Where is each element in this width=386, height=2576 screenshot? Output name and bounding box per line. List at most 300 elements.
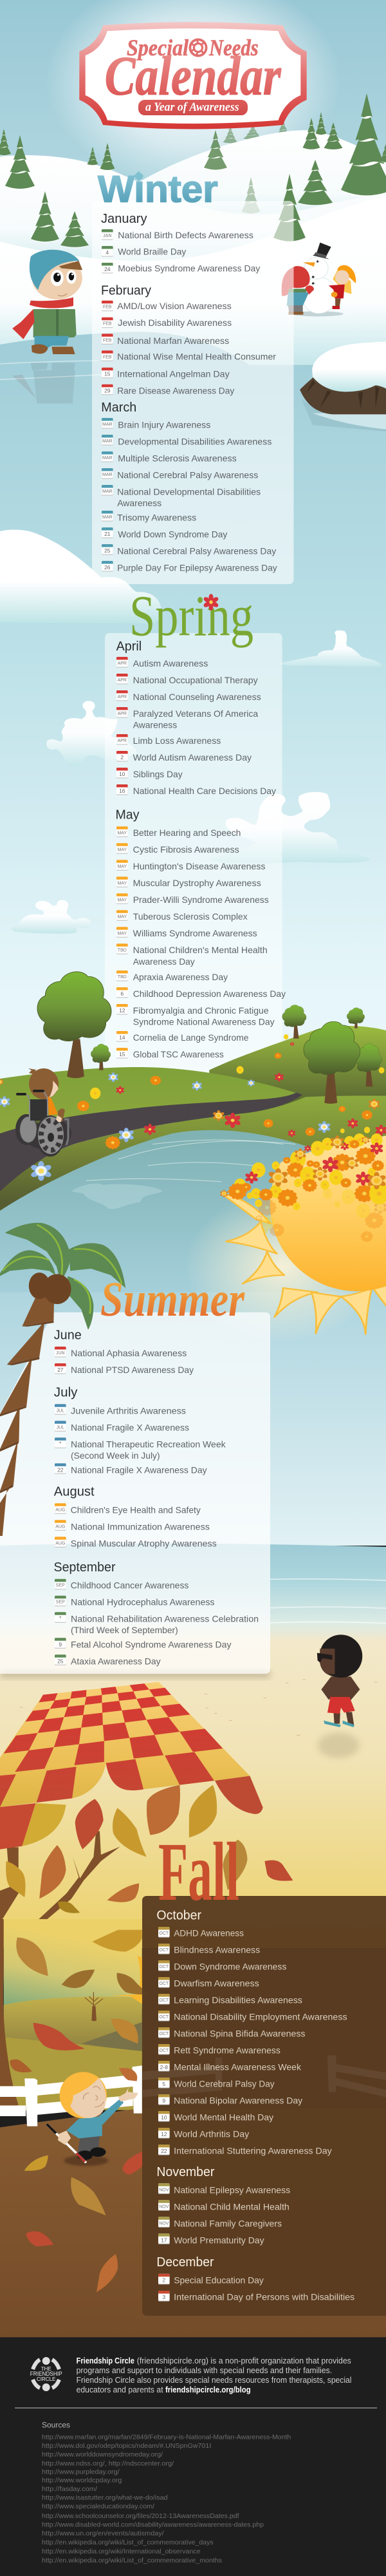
item: prematurity: World Prematurity Day bbox=[174, 2235, 264, 2246]
cloud reflection in lake bbox=[71, 1184, 163, 1209]
item: occupational therapy: National Occupational Therapy bbox=[133, 675, 258, 685]
item: tuberous sclerosis: Tuberous Sclerosis Complex bbox=[133, 911, 248, 922]
sun glimpse bbox=[109, 1956, 142, 2004]
checkered autumn tree canopy bbox=[0, 1682, 293, 1975]
item: eye health: Children's Eye Health and Safety bbox=[71, 1504, 201, 1515]
item: cerebral palsy day: National Cerebral Palsy Awareness Day bbox=[117, 545, 276, 556]
item: children's mental health bbox=[116, 943, 268, 967]
red squares bbox=[0, 1683, 223, 1807]
distant hill bbox=[4, 1996, 142, 2061]
ghost fence and trees inside panel bbox=[143, 2056, 386, 2098]
palm fronds bbox=[0, 1223, 125, 1330]
item: bipolar: National Bipolar Awareness Day bbox=[174, 2096, 302, 2106]
item: jewish disability: FEB bbox=[103, 322, 112, 327]
plaque frame bbox=[79, 22, 307, 129]
body bbox=[321, 1676, 360, 1700]
item: fibromyalgia: Fibromyalgia and Chronic Fatigue bbox=[133, 1005, 269, 1016]
item: blindness: OCT bbox=[159, 1948, 169, 1953]
sea bbox=[0, 1543, 386, 1642]
item: developmental: MAR bbox=[102, 439, 113, 444]
item: paralyzed veterans: Paralyzed Veterans Of America bbox=[133, 708, 258, 719]
title line: Needs: Needs bbox=[208, 35, 259, 61]
heading: Spring: Spring bbox=[129, 585, 253, 649]
item: rehabilitation: * bbox=[59, 1615, 62, 1621]
item: hydrocephalus: SEP bbox=[56, 1600, 65, 1605]
leaves over scene bbox=[10, 1930, 150, 2246]
item: children's mental health: National Children's Mental Health bbox=[133, 945, 268, 955]
sun flower crown bbox=[220, 1131, 386, 1244]
shirt bbox=[66, 2098, 124, 2139]
item: hearing and speech: MAY bbox=[117, 831, 127, 835]
item: MS: Multiple Sclerosis Awareness bbox=[118, 453, 237, 463]
lake ripples bbox=[86, 1140, 295, 1182]
item: muscular dystrophy: MAY bbox=[117, 881, 127, 886]
item: cerebral palsy: MAR bbox=[102, 473, 113, 477]
item: siblings bbox=[116, 768, 183, 779]
person on beach bbox=[317, 1634, 362, 1758]
item: rehabilitation: National Rehabilitation Awareness Celebration bbox=[71, 1613, 259, 1624]
snowman with two kids bbox=[282, 243, 356, 316]
item: dwarfism: OCT bbox=[159, 1982, 169, 1986]
item: birth defects: JAN bbox=[103, 234, 111, 238]
title line: Calendar: Calendar bbox=[105, 45, 282, 107]
yellow squares bbox=[0, 1682, 250, 1807]
sand speckles bbox=[20, 1680, 377, 1736]
item: braille: 4 bbox=[106, 249, 109, 256]
item: tuberous sclerosis: MAY bbox=[117, 914, 127, 919]
item: MS: MAR bbox=[102, 456, 113, 460]
item: ADHD: ADHD Awareness bbox=[174, 1928, 244, 1938]
sources list: http://www.un.org/en/events/autismday/ bbox=[42, 2530, 164, 2537]
item: aphasia: JUN bbox=[56, 1351, 65, 1356]
item: special education: Special Education Day bbox=[174, 2275, 264, 2286]
item: childhood cancer: SEP bbox=[56, 1584, 65, 1588]
right hill bbox=[209, 1026, 386, 1116]
item: apraxia: TBD bbox=[118, 975, 127, 980]
item: down syndrome: 21 bbox=[104, 531, 111, 537]
sources list: http://www.purpleday.org/ bbox=[42, 2468, 120, 2476]
heading: July: July bbox=[54, 1385, 77, 1399]
flip-flops bbox=[324, 1721, 354, 1727]
item: paralyzed veterans bbox=[116, 707, 258, 730]
item: stuttering: 22 bbox=[161, 2148, 167, 2154]
hands bbox=[58, 2088, 138, 2145]
item: down syndrome: OCT bbox=[159, 1965, 169, 1969]
seat back bbox=[30, 1099, 48, 1121]
item: cerebral palsy: National Cerebral Palsy Awareness bbox=[117, 469, 258, 480]
item: therapeutic recreation: * bbox=[59, 1440, 62, 1446]
child in wheelchair bbox=[15, 1068, 71, 1157]
heading: April: April bbox=[116, 639, 142, 654]
item: wise mental health: National Wise Mental Health Consumer bbox=[117, 351, 276, 361]
boy in teal hat bbox=[12, 250, 82, 404]
shadow bbox=[318, 1732, 360, 1758]
item: limb loss: Limb Loss Awareness bbox=[133, 735, 221, 746]
item: siblings: 10 bbox=[119, 771, 125, 777]
background: frozen water and spring sky bbox=[0, 322, 386, 1159]
item: brain injury: MAR bbox=[102, 422, 113, 427]
spring landscape and lake bbox=[0, 1026, 386, 1341]
item: stuttering: International Stuttering Awareness Day bbox=[174, 2146, 332, 2156]
item: fetal alcohol: 9 bbox=[59, 1641, 62, 1647]
logo: The Friendship Circle bbox=[30, 2357, 62, 2391]
item: fibromyalgia: Syndrome National Awareness Day bbox=[133, 1017, 275, 1027]
item: national developmental: MAR bbox=[102, 489, 113, 494]
road bbox=[0, 1093, 302, 1191]
item: aphasia: National Aphasia Awareness bbox=[71, 1348, 187, 1358]
item: hearing and speech: Better Hearing and Speech bbox=[133, 828, 241, 838]
item: siblings: Siblings Day bbox=[133, 769, 183, 779]
head bbox=[320, 1649, 340, 1678]
item: apraxia: Apraxia Awareness Day bbox=[133, 972, 228, 982]
sources heading: Sources bbox=[42, 2420, 70, 2429]
sources list: http://www.disabled-world.com/disability/awareness/awareness-dates.php bbox=[42, 2521, 264, 2529]
item: learning disabilities: OCT bbox=[159, 1998, 169, 2003]
item: fragile X day: 22 bbox=[57, 1466, 64, 1473]
frozen pond surface with streaks bbox=[0, 332, 386, 644]
item: global TSC: 15 bbox=[119, 1051, 125, 1057]
sources list: http://www.schoolcounselor.org/files/2012-13AwarenessDates.pdf bbox=[42, 2512, 239, 2520]
item: moebius: Moebius Syndrome Awareness Day bbox=[118, 263, 260, 274]
sources list: http://www.isastutter.org/what-we-do/isad bbox=[42, 2494, 168, 2502]
winter fir trees bbox=[0, 93, 386, 248]
logo: The Friendship Circle: FRIENDSHIP bbox=[30, 2371, 62, 2377]
item: huntington's: Huntington's Disease Awareness bbox=[133, 861, 265, 871]
item: mental illness: Mental Illness Awareness Week bbox=[174, 2062, 302, 2072]
item: global TSC: Global TSC Awareness bbox=[133, 1049, 224, 1059]
sand bbox=[0, 1639, 386, 1948]
item: children's mental health: Awareness Day bbox=[133, 956, 195, 967]
heading: Fall: Fall bbox=[158, 1826, 239, 1918]
item: wise mental health: FEB bbox=[103, 355, 112, 359]
meadow and bank bbox=[0, 1095, 386, 1213]
white fence bbox=[0, 2065, 142, 2126]
sources list: http://www.ndss.org/, http://ndsccenter.org/ bbox=[42, 2459, 174, 2467]
item: world CP day: 5 bbox=[162, 2081, 165, 2087]
title glow bbox=[45, 0, 341, 187]
sources list: http://www.dol.gov/odep/topics/ndeam/#.UNSpnGw701I bbox=[42, 2442, 211, 2450]
logo: The Friendship Circle: CIRCLE bbox=[37, 2376, 55, 2382]
item: AMD: FEB bbox=[103, 305, 112, 310]
item: rett: OCT bbox=[159, 2049, 169, 2053]
item: counseling: APR bbox=[118, 695, 127, 699]
item: down syndrome: Down Syndrome Awareness bbox=[174, 1962, 286, 1972]
front wheel bbox=[36, 1115, 64, 1157]
snow-capped stump bbox=[300, 342, 386, 431]
item: learning disabilities: Learning Disabilities Awareness bbox=[174, 1995, 302, 2005]
about text: programs and support to individuals with special needs and their families. bbox=[77, 2366, 332, 2375]
summer sky bbox=[0, 1256, 386, 1546]
footer bbox=[0, 2337, 386, 2576]
item: hydrocephalus: National Hydrocephalus Awareness bbox=[71, 1597, 215, 1607]
big trunk bbox=[0, 1919, 19, 2114]
item: brain injury: Brain Injury Awareness bbox=[118, 419, 210, 430]
item: mental health day: 10 bbox=[161, 2114, 167, 2121]
sources list: http://www.worldcpday.org bbox=[42, 2476, 122, 2484]
sources list: http://en.wikipedia.org/wiki/List_of_commemorative_months bbox=[42, 2557, 222, 2564]
item: PTSD: 27 bbox=[57, 1367, 64, 1373]
item: dwarfism: Dwarfism Awareness bbox=[174, 1978, 259, 1989]
heading: March: March bbox=[101, 401, 136, 415]
logo: The Friendship Circle: THE bbox=[41, 2366, 51, 2372]
item: spinal muscular atrophy: AUG bbox=[55, 1541, 65, 1546]
boy with white cane bbox=[47, 2072, 138, 2166]
trunk notch shadows bbox=[0, 1321, 53, 1493]
about text bbox=[77, 2356, 351, 2394]
palm trunk bbox=[0, 1294, 54, 1536]
heading: June: June bbox=[54, 1328, 82, 1342]
item: juvenile arthritis: Juvenile Arthritis Awareness bbox=[71, 1405, 186, 1416]
item: muscular dystrophy: Muscular Dystrophy Awareness bbox=[133, 878, 261, 888]
brown ground bbox=[0, 2108, 386, 2338]
item: childhood cancer: Childhood Cancer Awareness bbox=[71, 1580, 188, 1591]
item: immunization: AUG bbox=[55, 1524, 65, 1529]
item: cystic fibrosis: MAY bbox=[117, 848, 127, 852]
item: spina bifida: National Spina Bifida Awareness bbox=[174, 2029, 306, 2039]
tree trunk and branches bbox=[0, 1831, 120, 1975]
sun glow bbox=[185, 1191, 381, 1341]
item: prader-willi: Prader-Willi Syndrome Awareness bbox=[133, 895, 269, 905]
back fir trees bbox=[223, 120, 292, 144]
item: developmental: Developmental Disabilities Awareness bbox=[118, 436, 271, 446]
back wheel bbox=[15, 1114, 37, 1145]
item: arthritis day: World Arthritis Day bbox=[174, 2129, 249, 2139]
item: childhood depression: Childhood Depression Awareness Day bbox=[133, 989, 286, 999]
about text: friendshipcircle.org/blog bbox=[165, 2385, 251, 2394]
item: fetal alcohol: Fetal Alcohol Syndrome Awareness Day bbox=[71, 1639, 232, 1649]
item: paralyzed veterans: Awareness bbox=[133, 720, 177, 730]
meadow flowers bbox=[0, 1033, 386, 1181]
item: immunization: National Immunization Awareness bbox=[71, 1521, 210, 1531]
item: children's mental health: TBD bbox=[118, 948, 127, 952]
footrest bbox=[64, 1119, 68, 1145]
item: cerebral palsy day: 25 bbox=[104, 547, 111, 554]
item: cystic fibrosis: Cystic Fibrosis Awareness bbox=[133, 844, 239, 855]
heading: Winter: Winter bbox=[98, 168, 218, 210]
item: fibromyalgia: 12 bbox=[119, 1007, 125, 1014]
clouds bbox=[11, 630, 381, 934]
palm tree bbox=[0, 1223, 125, 1536]
sources list: http://fasday.com/ bbox=[42, 2485, 97, 2493]
item: rett: Rett Syndrome Awareness bbox=[174, 2045, 280, 2056]
item: williams syndrome: Williams Syndrome Awareness bbox=[133, 928, 257, 938]
item: prematurity: 17 bbox=[161, 2237, 167, 2243]
item: counseling: National Counseling Awareness bbox=[133, 692, 261, 702]
item: ataxia: Ataxia Awareness Day bbox=[71, 1656, 161, 1666]
item: therapeutic recreation bbox=[55, 1437, 226, 1461]
panel: summer list bbox=[0, 1312, 270, 1678]
item: health care decisions: 16 bbox=[119, 788, 125, 794]
item: huntington's: MAY bbox=[117, 864, 127, 869]
item: mental illness: 2-8 bbox=[160, 2064, 168, 2070]
item: rare disease: 29 bbox=[104, 388, 111, 394]
item: autism: Autism Awareness bbox=[133, 658, 208, 668]
heading: January: January bbox=[101, 212, 147, 226]
icon: friendship circle logo bbox=[189, 39, 207, 57]
item: rehabilitation: (Third Week of September) bbox=[71, 1625, 178, 1635]
hanging scallop bbox=[215, 1776, 263, 1814]
panel: spring list bbox=[105, 633, 286, 1084]
item: williams syndrome: MAY bbox=[117, 931, 127, 936]
legs bbox=[333, 1712, 354, 1725]
orange shirt bbox=[48, 1096, 58, 1115]
item: rehabilitation bbox=[55, 1612, 259, 1635]
palm midribs bbox=[3, 1225, 122, 1314]
pants bbox=[78, 2136, 100, 2153]
spring trees bbox=[37, 972, 381, 1104]
item: fragile X: JUL bbox=[57, 1425, 64, 1430]
panel: fall list bbox=[142, 1896, 386, 2316]
item: ataxia: 25 bbox=[57, 1658, 64, 1664]
item: childhood depression: 6 bbox=[120, 990, 124, 997]
snow mound bottom left bbox=[0, 529, 161, 623]
face bbox=[70, 2078, 106, 2118]
item: angelman: International Angelman Day bbox=[117, 369, 230, 379]
plaque white centre bbox=[86, 28, 300, 124]
heading: February: February bbox=[101, 284, 151, 298]
item: limb loss: APR bbox=[118, 739, 127, 743]
item: arthritis day: 12 bbox=[161, 2131, 167, 2137]
item: persons with disabilities: 3 bbox=[162, 2294, 165, 2300]
item: juvenile arthritis: JUL bbox=[57, 1408, 64, 1413]
item: spinal muscular atrophy: Spinal Muscular Atrophy Awareness bbox=[71, 1538, 217, 1548]
sources list: http://www.marfan.org/marfan/2849/February-is-National-Marfan-Awareness-Month bbox=[42, 2433, 291, 2441]
item: prader-willi: MAY bbox=[117, 898, 127, 902]
item: persons with disabilities: International Day of Persons with Disabilities bbox=[174, 2292, 354, 2302]
item: national developmental bbox=[102, 485, 261, 508]
item: birth defects: National Birth Defects Awareness bbox=[118, 230, 253, 240]
hair bbox=[320, 1634, 362, 1678]
item: jewish disability: Jewish Disability Awareness bbox=[118, 317, 232, 328]
item: trisomy: Trisomy Awareness bbox=[117, 512, 196, 522]
darker hill wedge bbox=[81, 2022, 142, 2052]
item: family caregivers: NOV bbox=[159, 2221, 169, 2226]
item: family caregivers: National Family Caregivers bbox=[174, 2219, 282, 2229]
eyes and smile bbox=[83, 2087, 104, 2107]
heading: December: December bbox=[156, 2255, 214, 2269]
item: world CP day: World Cerebral Palsy Day bbox=[174, 2079, 275, 2089]
heading: September: September bbox=[54, 1560, 116, 1575]
item: child mental health: NOV bbox=[159, 2204, 169, 2209]
field bbox=[0, 2037, 142, 2110]
item: ADHD: OCT bbox=[159, 1931, 169, 1936]
falling leaves bbox=[6, 1785, 293, 1913]
item: spina bifida: OCT bbox=[159, 2032, 169, 2036]
heading: Summer: Summer bbox=[100, 1273, 245, 1327]
about text: educators and parents at bbox=[77, 2385, 163, 2394]
item: epilepsy: NOV bbox=[159, 2188, 169, 2192]
item: trisomy: MAR bbox=[102, 515, 113, 520]
sources list bbox=[42, 2433, 291, 2564]
item: purple day: Purple Day For Epilepsy Awareness Day bbox=[117, 562, 277, 573]
cane bbox=[47, 2124, 86, 2163]
lower canopy bbox=[0, 1803, 35, 1850]
hair and head bbox=[28, 1068, 59, 1099]
heading: August: August bbox=[54, 1484, 95, 1499]
item: national developmental: National Developmental Disabilities bbox=[117, 486, 261, 497]
title plaque bbox=[79, 22, 307, 129]
item: cornelia de lange: Cornelia de Lange Syndrome bbox=[133, 1032, 249, 1043]
item: health care decisions: National Health Care Decisions Day bbox=[133, 786, 276, 796]
item: employment: OCT bbox=[159, 2015, 169, 2020]
item: special education: 2 bbox=[162, 2277, 165, 2284]
item: therapeutic recreation: National Therapeutic Recreation Week bbox=[71, 1439, 226, 1449]
coconuts bbox=[29, 1273, 71, 1304]
shoes bbox=[77, 2150, 93, 2160]
item: moebius: 24 bbox=[104, 266, 111, 272]
item: world autism day: World Autism Awareness Day bbox=[133, 752, 252, 762]
red shorts bbox=[327, 1697, 355, 1714]
item: marfan: FEB bbox=[103, 338, 112, 343]
heading: October: October bbox=[156, 1909, 201, 1923]
winter hills bbox=[0, 130, 386, 365]
sources list: http://en.wikipedia.org/wiki/International_observance bbox=[42, 2548, 201, 2555]
left hill bbox=[0, 1067, 295, 1138]
hand bbox=[56, 1115, 62, 1122]
heading: November: November bbox=[156, 2165, 215, 2179]
sun bbox=[270, 1136, 386, 1291]
title line: Special: Special bbox=[127, 35, 188, 61]
item: occupational therapy: APR bbox=[118, 678, 127, 683]
about text: (friendshipcircle.org) is a non-profit organization that provides bbox=[137, 2356, 351, 2365]
subtitle pill: a Year of Awareness bbox=[145, 100, 239, 114]
autumn landscape bbox=[0, 1919, 386, 2338]
item: blindness: Blindness Awareness bbox=[174, 1945, 260, 1955]
knee bbox=[58, 1108, 65, 1122]
item: cornelia de lange: 14 bbox=[119, 1034, 125, 1041]
sea foam streaks bbox=[270, 1579, 386, 1624]
sources list: http://www.specialeducationday.com/ bbox=[42, 2503, 154, 2510]
item: PTSD: National PTSD Awareness Day bbox=[71, 1365, 194, 1375]
item: angelman: 15 bbox=[104, 371, 111, 377]
item: child mental health: National Child Mental Health bbox=[174, 2202, 290, 2212]
item: fragile X day: National Fragile X Awareness Day bbox=[71, 1464, 207, 1475]
sun rays bbox=[221, 1193, 386, 1334]
item: fragile X: National Fragile X Awareness bbox=[71, 1422, 189, 1432]
autumn sky bbox=[4, 1919, 142, 2009]
item: marfan: National Marfan Awareness bbox=[117, 336, 229, 346]
item: epilepsy: National Epilepsy Awareness bbox=[174, 2185, 290, 2195]
sources list: http://www.worlddownsyndromeday.org/ bbox=[42, 2451, 163, 2459]
orange leaf near bottom bbox=[96, 2254, 118, 2292]
item: rare disease: Rare Disease Awareness Day bbox=[117, 386, 234, 396]
heading: May: May bbox=[116, 808, 139, 822]
icon: red flower bbox=[203, 594, 219, 611]
shadow bbox=[64, 2155, 108, 2166]
panel: winter list bbox=[92, 201, 293, 584]
about text: Friendship Circle bbox=[77, 2356, 134, 2365]
item: national developmental: Awareness bbox=[117, 498, 161, 508]
hair bbox=[60, 2072, 107, 2118]
bare sapling bbox=[85, 1992, 103, 2007]
item: braille: World Braille Day bbox=[118, 246, 186, 256]
leaf over panel edge bbox=[123, 2149, 151, 2175]
about text: Friendship Circle also provides special needs resources from therapists, special bbox=[77, 2376, 351, 2385]
item: fibromyalgia bbox=[116, 1004, 275, 1027]
item: autism: APR bbox=[118, 661, 127, 666]
item: down syndrome: World Down Syndrome Day bbox=[118, 529, 227, 539]
lake bbox=[0, 1130, 386, 1293]
sunglasses bbox=[317, 1653, 333, 1663]
item: AMD: AMD/Low Vision Awareness bbox=[117, 301, 232, 311]
sources list: http://en.wikipedia.org/wiki/List_of_commemorative_days bbox=[42, 2539, 214, 2546]
item: bipolar: 9 bbox=[162, 2098, 165, 2104]
item: therapeutic recreation: (Second Week in July) bbox=[71, 1450, 160, 1461]
item: purple day: 26 bbox=[104, 564, 111, 571]
background: winter sky bbox=[0, 0, 386, 361]
item: eye health: AUG bbox=[55, 1508, 65, 1512]
item: employment: National Disability Employment Awareness bbox=[174, 2012, 347, 2022]
